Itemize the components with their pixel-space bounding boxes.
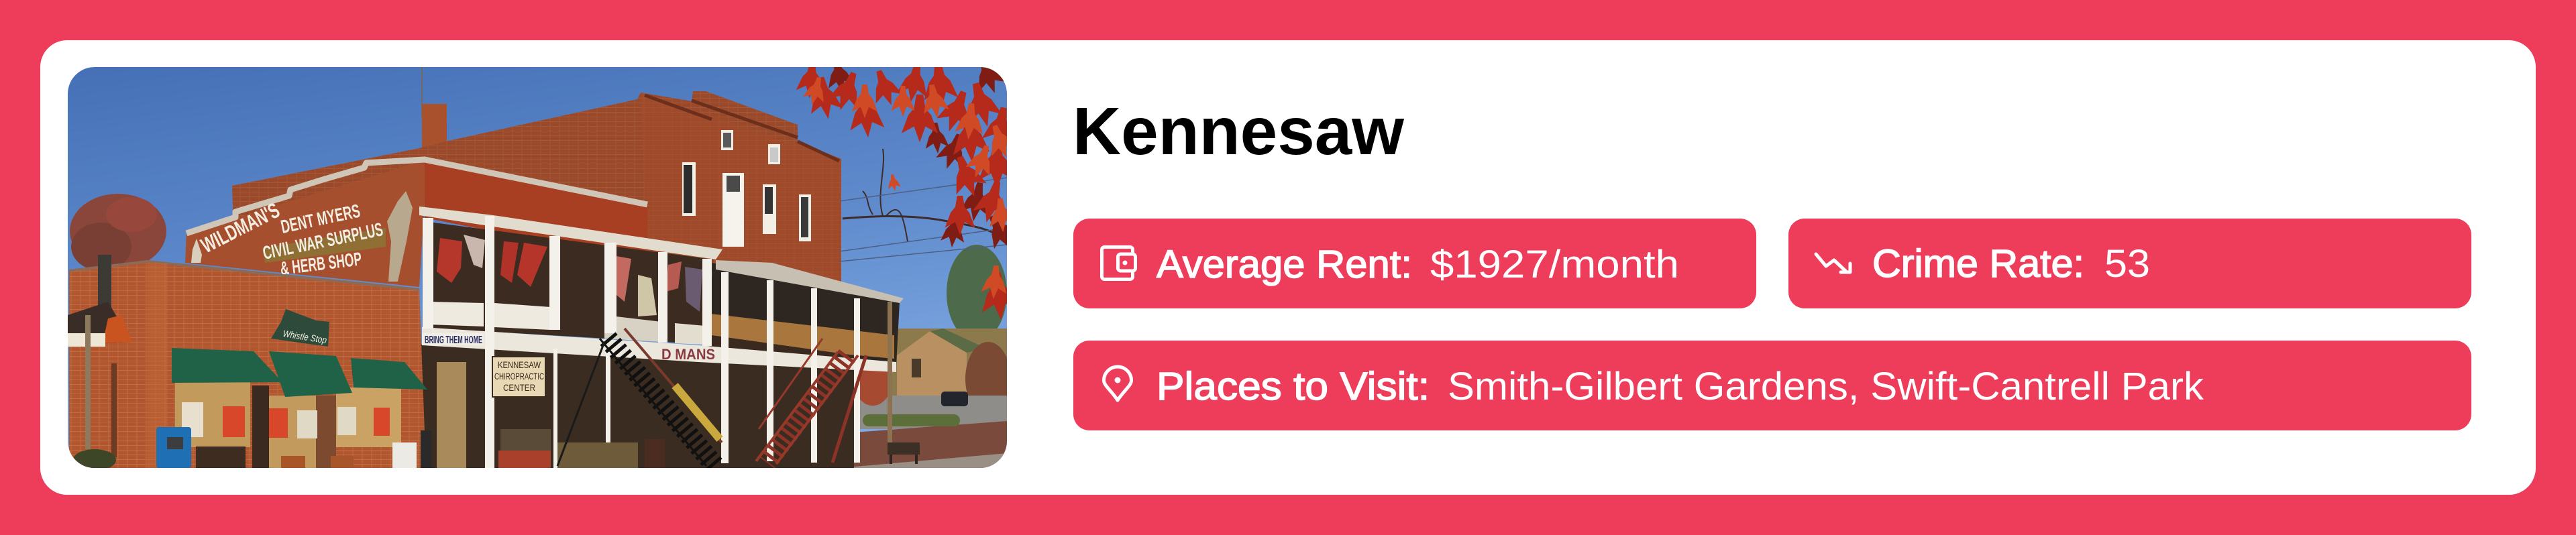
blue newspaper box xyxy=(156,427,191,468)
stat pill: average rent xyxy=(1073,219,1756,308)
value: average rent: $1927/month xyxy=(1430,243,1679,286)
value: crime rate: 53 xyxy=(2104,242,2150,286)
icon: trending down xyxy=(1816,254,1850,272)
upper windows xyxy=(682,130,811,247)
two-storey porch: BRING THEM HOME xyxy=(425,335,482,346)
title: Kennesaw xyxy=(1073,94,1404,168)
porch band and ground floor xyxy=(419,345,854,469)
red staircase xyxy=(756,339,866,464)
bench and planters xyxy=(73,430,431,471)
chiropractic sign: CENTER xyxy=(503,382,535,393)
park bench xyxy=(888,442,920,464)
chiropractic sign xyxy=(492,357,545,397)
middle brick wall with painted signage: DENT MYERS xyxy=(279,200,362,237)
bare branches xyxy=(839,149,1007,261)
icon: wallet xyxy=(1102,247,1135,279)
left autumn tree xyxy=(70,194,166,271)
green awnings xyxy=(172,348,427,397)
upper railings xyxy=(429,302,705,345)
chiropractic sign: KENNESAW xyxy=(498,359,541,370)
green cafe sign xyxy=(271,309,329,347)
label: average rent: Average Rent: xyxy=(1157,243,1412,286)
stat pill: places to visit xyxy=(1073,341,2471,430)
label: places to visit: Places to Visit: xyxy=(1157,365,1430,408)
green cafe sign: Whistle Stop xyxy=(282,328,327,345)
hanging flags xyxy=(437,235,702,316)
middle brick wall with painted signage: CIVIL WAR SURPLUS xyxy=(261,219,385,263)
train sign xyxy=(68,255,132,449)
distant trees and house xyxy=(839,245,1011,468)
black staircase xyxy=(557,329,722,466)
red maple leaves xyxy=(796,54,1022,322)
middle brick wall with painted signage: & HERB SHOP xyxy=(279,248,363,279)
two-storey porch xyxy=(419,206,920,469)
upper brick building xyxy=(232,67,841,288)
icon: location pin xyxy=(1104,367,1131,400)
label: crime rate: Crime Rate: xyxy=(1872,242,2084,286)
lower brick building xyxy=(68,255,431,471)
two-storey porch: D MANS xyxy=(661,346,715,363)
stat pill: crime rate xyxy=(1788,219,2471,308)
middle brick wall with painted signage xyxy=(185,160,647,287)
value: places to visit: Smith-Gilbert Gardens, Swift-Cantrell Park xyxy=(1448,365,2204,408)
middle brick wall with painted signage: WILDMAN'S xyxy=(197,198,283,257)
boarded windows and door xyxy=(175,382,401,468)
storefront flowers and windows xyxy=(437,362,665,468)
porch columns xyxy=(423,216,860,468)
chiropractic sign: CHIROPRACTIC xyxy=(494,371,544,381)
photo: historic brick storefront in Kennesaw xyxy=(68,67,1007,468)
